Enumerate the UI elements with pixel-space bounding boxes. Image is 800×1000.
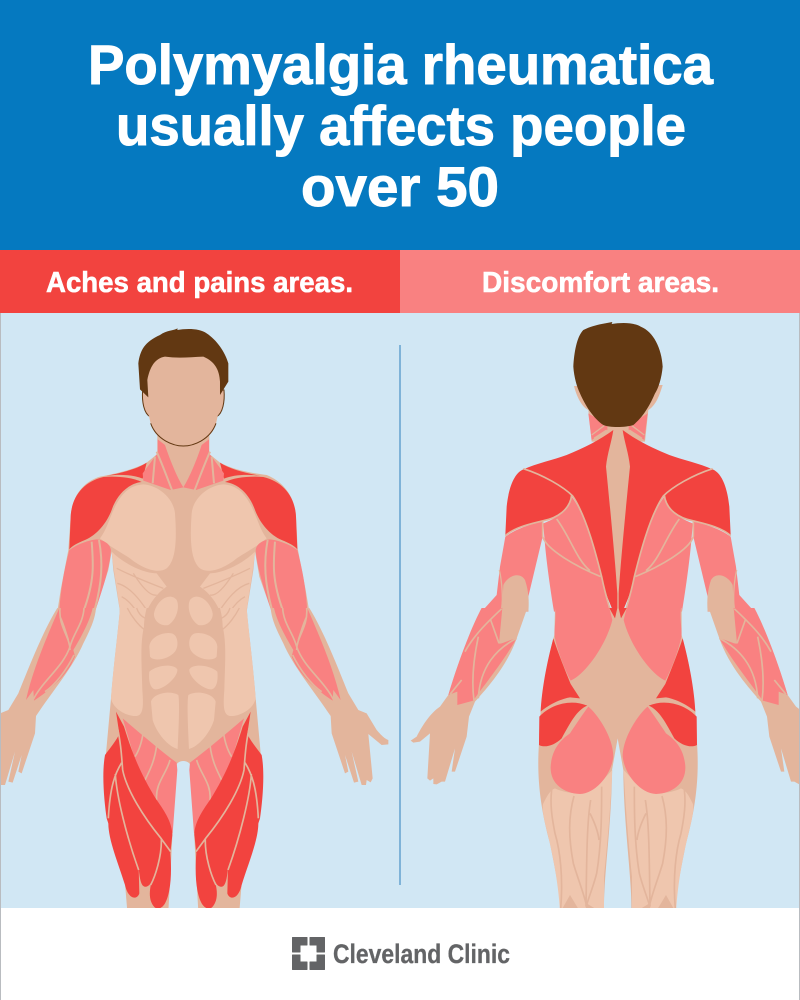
title banner: Polymyalgia rheumatica (88, 33, 714, 96)
front upper muscles (59, 439, 183, 612)
column heading: discomfort (400, 250, 800, 313)
column heading: aches and pains (0, 250, 400, 313)
front skin upper body (57, 433, 309, 612)
back upper muscles (482, 413, 617, 612)
logo: Cleveland Clinic (292, 938, 510, 970)
front arm and hand (271, 608, 388, 785)
icon: cross mark (292, 938, 324, 970)
back ears and neck (574, 385, 663, 442)
title banner: usually affects people (116, 94, 686, 157)
figure: back view (411, 322, 800, 912)
front torso and legs skin (105, 608, 262, 912)
title banner: over 50 (301, 155, 499, 218)
panel side edges (0, 313, 800, 1000)
front lower half muscles (103, 597, 179, 909)
illustration background panel (0, 313, 800, 909)
back arm and hand (411, 608, 527, 784)
column heading: aches and pains: Aches and pains areas. (46, 267, 353, 299)
back lower half muscles (539, 608, 617, 912)
footer band (0, 908, 800, 1000)
logo: Cleveland Clinic: Cleveland Clinic (333, 939, 510, 969)
divider between views (399, 345, 401, 885)
front head (138, 328, 228, 446)
back hips and legs skin (538, 608, 698, 912)
column heading: discomfort: Discomfort areas. (482, 267, 719, 299)
figure: front view (0, 328, 388, 912)
title banner (0, 0, 800, 250)
back hair (573, 322, 663, 427)
back spine skin (604, 427, 632, 612)
